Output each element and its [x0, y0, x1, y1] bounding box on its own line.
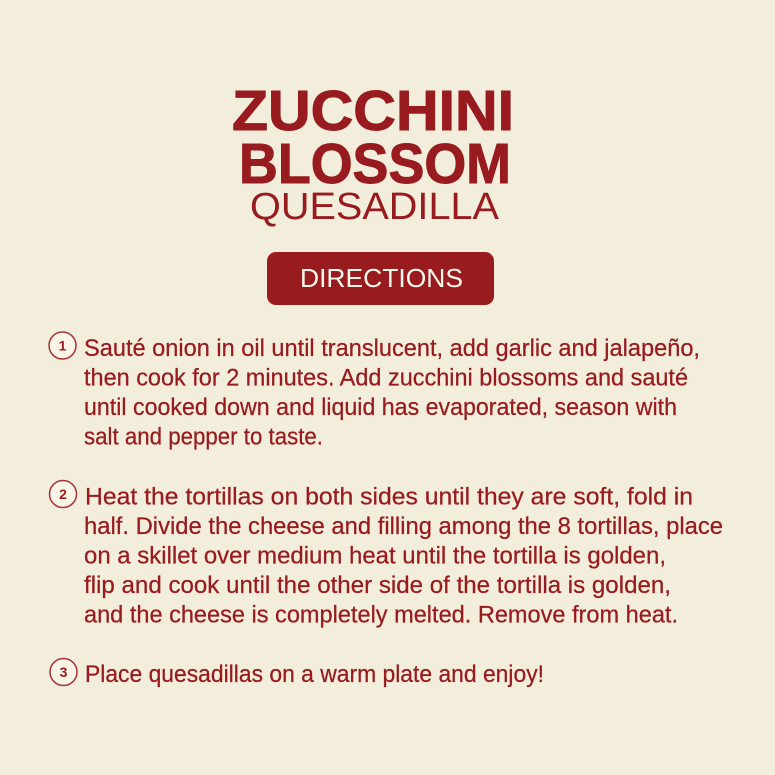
icon: number 1: [49, 332, 76, 359]
step 2: [50, 480, 723, 628]
icon: number 2: [50, 480, 76, 508]
text: step 2: on a skillet over medium heat until the tortilla is golden,: [84, 542, 666, 570]
icon: number 3: 3: [60, 664, 68, 680]
text: step 2: Heat the tortillas on both sides until they are soft, fold in: [85, 484, 693, 510]
directions badge: [267, 252, 494, 305]
directions badge: DIRECTIONS: [300, 263, 463, 293]
text: step 2: half. Divide the cheese and filling among the 8 tortillas, place: [84, 513, 723, 540]
text: step 3: Place quesadillas on a warm plate and enjoy!: [85, 661, 544, 688]
text: step 1: Sauté onion in oil until translucent, add garlic and jalapeño,: [84, 335, 700, 362]
icon: number 3: [50, 658, 77, 686]
step 3: [50, 658, 544, 688]
title: [232, 79, 514, 228]
text: step 1: until cooked down and liquid has evaporated, season with: [84, 394, 677, 421]
text: step 2: and the cheese is completely melted. Remove from heat.: [84, 602, 678, 628]
text: step 1: salt and pepper to taste.: [84, 424, 323, 450]
icon: number 1: 1: [59, 338, 67, 354]
text: step 1: [84, 335, 700, 450]
title: BLOSSOM: [239, 132, 511, 196]
icon: number 2: 2: [59, 486, 67, 502]
text: step 2: [84, 484, 723, 628]
text: step 2: flip and cook until the other side of the tortilla is golden,: [84, 572, 671, 599]
title: QUESADILLA: [250, 186, 500, 228]
step 1: [49, 332, 700, 450]
title: ZUCCHINI: [232, 79, 514, 143]
text: step 1: then cook for 2 minutes. Add zucchini blossoms and sauté: [84, 364, 688, 392]
